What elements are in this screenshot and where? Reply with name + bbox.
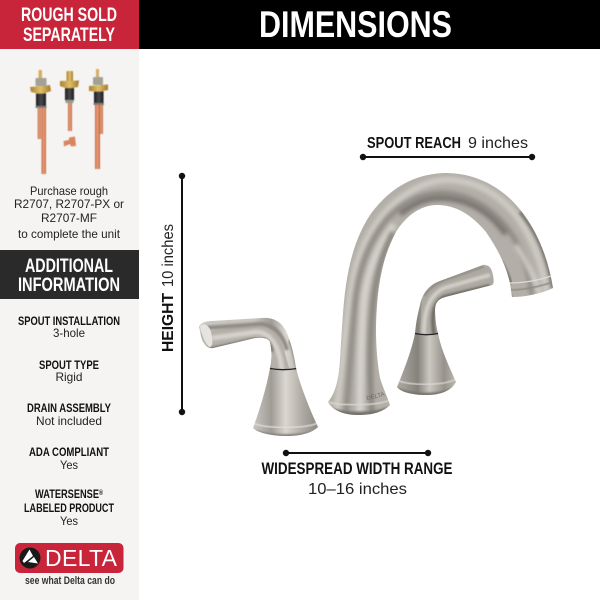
dimension: height: [160, 173, 185, 415]
text: purchase rough note: R2707-MF: [41, 211, 97, 225]
image: rough valves: [30, 69, 108, 174]
dimension: widespread width range: WIDESPREAD WIDTH RANGE: [262, 459, 452, 478]
dimension: spout reach: SPOUT REACH: [367, 135, 461, 152]
spec: spout installation: SPOUT INSTALLATION: [18, 314, 120, 328]
dimension: widespread width range: 10–16 inches: [308, 481, 407, 498]
spec: watersense labeled product: Yes: [60, 514, 78, 528]
spec: spout installation: [18, 314, 120, 340]
spec: ADA compliant: ADA COMPLIANT: [29, 445, 110, 459]
dimension: spout reach: 9 inches: [468, 135, 528, 152]
image: right handle: [397, 264, 494, 395]
panel: left sidebar: [0, 49, 139, 600]
banner: additional information: [0, 250, 139, 299]
banner: rough sold separately: ROUGH SOLD: [21, 5, 117, 26]
spec: spout installation: 3-hole: [53, 326, 85, 340]
spec: drain assembly: Not included: [36, 414, 102, 428]
banner: rough sold separately: [0, 0, 139, 49]
spec: drain assembly: DRAIN ASSEMBLY: [27, 401, 111, 415]
spec: watersense labeled product: WATERSENSE: [35, 487, 118, 501]
spec: watersense labeled product: LABELED PRODUCT: [24, 501, 114, 515]
logo: Delta: DELTA: [45, 545, 118, 571]
spec: drain assembly: [27, 401, 111, 428]
banner: dimensions title: DIMENSIONS: [259, 4, 452, 45]
logo: Delta: see what Delta can do: [25, 575, 115, 587]
dimension: height: HEIGHT: [160, 293, 177, 352]
text: purchase rough note: [14, 184, 124, 241]
spec: watersense labeled product: [24, 487, 114, 528]
banner: dimensions title: [139, 0, 600, 49]
banner: additional information: ADDITIONAL: [25, 256, 113, 277]
spec: spout type: SPOUT TYPE: [39, 358, 99, 372]
spec: spout type: [39, 358, 99, 384]
spec: ADA compliant: Yes: [60, 458, 78, 472]
dimension: height: 10 inches: [160, 224, 177, 287]
text: purchase rough note: Purchase rough: [30, 184, 108, 198]
banner: rough sold separately: SEPARATELY: [23, 25, 115, 46]
banner: additional information: INFORMATION: [18, 275, 120, 296]
dimension: widespread width range: [262, 450, 452, 498]
logo: Delta: [15, 543, 124, 587]
dimension: spout reach: [360, 135, 535, 160]
spec: watersense labeled product: ®: [99, 489, 104, 497]
spec: spout type: Rigid: [56, 370, 82, 384]
image: faucet spout: [328, 173, 553, 415]
spec: ADA compliant: [29, 445, 110, 472]
image: left handle: [199, 318, 318, 436]
image: faucet spout: DELTA: [366, 392, 385, 402]
text: purchase rough note: to complete the unit: [18, 227, 121, 241]
text: purchase rough note: R2707, R2707-PX or: [14, 197, 124, 211]
